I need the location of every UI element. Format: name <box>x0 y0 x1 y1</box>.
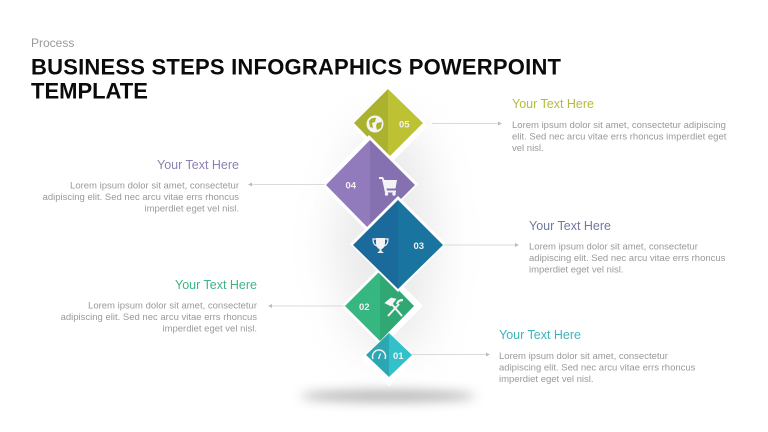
icon: hammer and wrench <box>385 298 403 316</box>
text block 05: elit. Sed nec arcu vitae errs rhoncus imperdiet eget <box>512 132 727 142</box>
step 02 diamond <box>341 265 423 347</box>
text block 04: imperdiet eget vel nisl. <box>144 204 239 214</box>
text block 02: Lorem ipsum dolor sit amet, consectetur <box>88 300 257 312</box>
floor shadow <box>300 390 476 402</box>
number 04: 04 <box>346 180 357 192</box>
step 03 diamond <box>350 196 446 292</box>
icon: gauge <box>372 350 386 359</box>
soft glow behind column <box>330 130 440 350</box>
arrow 04 <box>248 182 325 186</box>
text block 04: Lorem ipsum dolor sit amet, consectetur <box>70 180 239 192</box>
step 05 diamond <box>352 88 428 164</box>
arrow 05 <box>432 122 502 126</box>
text block 02 <box>61 278 257 334</box>
section label: Process <box>31 36 74 50</box>
text block 01: Your Text Here <box>499 328 581 342</box>
text block 01 <box>499 328 696 385</box>
number 05: 05 <box>399 120 410 130</box>
diamond column <box>320 88 446 386</box>
text block 02: imperdiet eget vel nisl. <box>162 324 257 334</box>
text block 03: imperdiet eget vel nisl. <box>529 264 624 276</box>
text block 01: Lorem ipsum dolor sit amet, consectetur <box>499 351 668 362</box>
title: BUSINESS STEPS INFOGRAPHICS POWERPOINT <box>31 54 562 80</box>
text block 01: imperdiet eget vel nisl. <box>499 374 594 385</box>
text block 03 <box>529 219 726 276</box>
number 01: 01 <box>393 351 404 362</box>
text block 02: adipiscing elit. Sed nec arcu vitae errs rhoncus <box>61 312 257 323</box>
text block 05: Your Text Here <box>512 97 594 111</box>
step 01 diamond <box>361 333 417 386</box>
icon: globe <box>366 116 384 132</box>
text block 05: vel nisl. <box>512 143 544 154</box>
text block 03: adipiscing elit. Sed nec arcu vitae errs rhoncus <box>529 253 726 264</box>
number 03: 03 <box>414 241 424 252</box>
arrow 03 <box>443 243 519 247</box>
text block 01: adipiscing elit. Sed nec arcu vitae errs rhoncus <box>499 362 696 374</box>
title: TEMPLATE <box>31 78 148 104</box>
text block 04: Your Text Here <box>157 158 239 172</box>
text block 05 <box>512 97 727 154</box>
number 02: 02 <box>359 302 370 313</box>
icon: trophy <box>373 238 388 253</box>
arrow 02 <box>268 304 345 308</box>
text block 04 <box>43 158 239 214</box>
text block 03: Your Text Here <box>529 219 611 233</box>
icon: shopping cart <box>379 177 397 196</box>
text block 04: adipiscing elit. Sed nec arcu vitae errs rhoncus <box>43 192 239 203</box>
text block 02: Your Text Here <box>175 278 257 292</box>
text block 05: Lorem ipsum dolor sit amet, consectetur adipiscing <box>512 120 726 131</box>
text block 03: Lorem ipsum dolor sit amet, consectetur <box>529 242 698 252</box>
step 04 diamond <box>320 135 418 233</box>
title <box>31 54 562 104</box>
arrow 01 <box>412 352 490 356</box>
